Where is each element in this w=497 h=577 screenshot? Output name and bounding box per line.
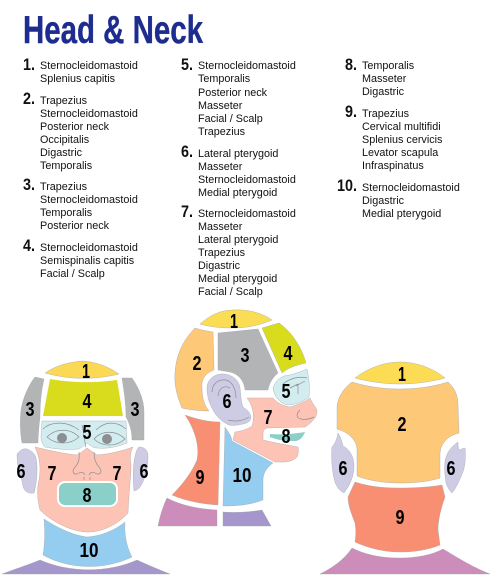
front view labels: 3 xyxy=(130,399,140,421)
front view labels: 6 xyxy=(16,461,26,483)
front view labels xyxy=(16,361,148,562)
legend item 4: 4. xyxy=(23,237,35,255)
zone 5 eyes xyxy=(41,421,127,449)
side view head diagram xyxy=(158,310,317,526)
zone 9 neck back xyxy=(172,415,220,505)
zone 8 mouth xyxy=(58,482,117,506)
zone 1 crown xyxy=(355,362,445,384)
zone 7 face xyxy=(35,447,133,532)
zone 4 forehead xyxy=(262,323,306,373)
zone 4 forehead xyxy=(43,379,123,416)
shoulders xyxy=(320,548,490,574)
side view labels: 2 xyxy=(192,353,202,375)
legend item 7: Digastric xyxy=(198,260,241,272)
back view labels: 6 xyxy=(446,458,456,480)
front view labels: 8 xyxy=(82,485,92,507)
nose xyxy=(73,452,101,480)
zone 3 right temple xyxy=(122,378,144,440)
legend item 6 xyxy=(181,143,296,199)
right eye xyxy=(94,423,126,445)
zone 2 back of head xyxy=(337,382,459,483)
legend item 7: Lateral pterygoid xyxy=(198,234,278,246)
legend item 7: Sternocleidomastoid xyxy=(198,208,296,220)
back view labels: 6 xyxy=(338,458,348,480)
legend item 6: Masseter xyxy=(198,161,243,173)
side view labels: 6 xyxy=(222,391,232,413)
legend item 8: 8. xyxy=(345,56,357,74)
legend item 9: Splenius cervicis xyxy=(362,134,443,146)
shoulders xyxy=(2,560,170,574)
legend item 5: Trapezius xyxy=(198,126,246,138)
legend item 10: Medial pterygoid xyxy=(362,208,441,220)
legend item 4 xyxy=(23,237,138,280)
legend item 5: Masseter xyxy=(198,100,243,112)
side view labels: 10 xyxy=(232,465,252,487)
zone 7 cheek and jaw xyxy=(233,398,317,462)
front view labels: 3 xyxy=(26,399,34,421)
legend item 4: Sternocleidomastoid xyxy=(40,242,138,254)
side view labels: 3 xyxy=(240,345,250,367)
left eye xyxy=(43,423,86,447)
legend item 4: Facial / Scalp xyxy=(40,268,105,280)
legend item 9: 9. xyxy=(345,103,357,121)
legend item 10 xyxy=(337,177,460,220)
legend item 10: Sternocleidomastoid xyxy=(362,182,460,194)
legend item 7: Medial pterygoid xyxy=(198,273,277,285)
zone 2 back of head xyxy=(175,328,214,411)
side view labels: 1 xyxy=(230,311,238,333)
legend item 2: 2. xyxy=(23,90,35,108)
zone 6 left ear xyxy=(17,449,37,493)
legend item 1 xyxy=(23,56,138,85)
legend item 6: Sternocleidomastoid xyxy=(198,174,296,186)
legend item 9: Trapezius xyxy=(362,108,410,120)
legend item 2 xyxy=(23,90,138,172)
left shoulder xyxy=(158,498,217,526)
legend item 6: Medial pterygoid xyxy=(198,187,277,199)
legend item 3: Posterior neck xyxy=(40,220,110,232)
side view labels: 5 xyxy=(282,381,290,403)
front view labels: 5 xyxy=(82,422,92,444)
zone 3 temporal xyxy=(218,329,278,390)
legend item 6: 6. xyxy=(181,143,193,161)
legend item 7: Masseter xyxy=(198,221,243,233)
eye detail xyxy=(283,377,307,394)
legend item 7: Trapezius xyxy=(198,247,246,259)
front view head diagram xyxy=(2,361,170,574)
legend item 7: Facial / Scalp xyxy=(198,286,263,298)
front view labels: 4 xyxy=(82,391,92,413)
legend item 2: Trapezius xyxy=(40,95,88,107)
legend item 5: Sternocleidomastoid xyxy=(198,60,296,72)
legend item 8: Masseter xyxy=(362,73,407,85)
ear detail xyxy=(212,380,249,421)
legend item 3: Trapezius xyxy=(40,181,88,193)
side view labels: 4 xyxy=(284,343,293,365)
front view labels: 10 xyxy=(80,540,98,562)
side view labels: 9 xyxy=(196,467,204,489)
legend item 3: Temporalis xyxy=(40,207,93,219)
legend item 10: Digastric xyxy=(362,195,405,207)
zone 9 neck xyxy=(348,482,445,552)
front view labels: 7 xyxy=(48,463,56,485)
back view labels: 1 xyxy=(398,364,406,386)
zone 6 right ear xyxy=(133,447,148,491)
back view head diagram xyxy=(320,362,490,574)
legend item 4: Semispinalis capitis xyxy=(40,255,135,267)
legend item 9 xyxy=(345,103,443,172)
side view labels: 7 xyxy=(264,407,272,429)
legend item 2: Digastric xyxy=(40,147,83,159)
zone 1 crown xyxy=(45,361,119,378)
legend item 3: 3. xyxy=(23,176,35,194)
legend item 1: 1. xyxy=(23,56,35,74)
front view labels: 7 xyxy=(112,463,122,485)
legend item 1: Sternocleidomastoid xyxy=(40,60,138,72)
zone 1 crown xyxy=(200,310,272,328)
legend item 7: 7. xyxy=(181,203,193,221)
zone 6 left ear xyxy=(332,433,354,493)
legend item 2: Posterior neck xyxy=(40,121,110,133)
back view labels xyxy=(338,364,456,529)
back view labels: 9 xyxy=(396,507,404,529)
legend item 9: Infraspinatus xyxy=(362,160,424,172)
title: Head & Neck xyxy=(23,9,203,52)
legend item 3 xyxy=(23,176,138,232)
legend item 5: 5. xyxy=(181,56,193,74)
legend item 8: Digastric xyxy=(362,86,405,98)
legend item 5: Posterior neck xyxy=(198,87,268,99)
back view labels: 2 xyxy=(398,414,406,436)
legend item 10: 10. xyxy=(337,177,357,195)
right shoulder xyxy=(223,510,271,526)
legend item 5 xyxy=(181,56,296,138)
zone 10 neck xyxy=(43,519,132,567)
front view labels: 1 xyxy=(82,361,90,383)
legend column 1 xyxy=(23,56,138,280)
legend column 3 xyxy=(337,56,460,220)
zone 6 right ear xyxy=(445,442,465,493)
legend item 5: Facial / Scalp xyxy=(198,113,263,125)
legend item 5: Temporalis xyxy=(198,73,251,85)
zone 6 ear xyxy=(207,374,251,425)
legend item 2: Sternocleidomastoid xyxy=(40,108,138,120)
legend item 8 xyxy=(345,56,415,98)
legend item 1: Splenius capitis xyxy=(40,73,116,85)
legend item 9: Levator scapula xyxy=(362,147,438,159)
legend column 2 xyxy=(181,56,296,298)
side view labels: 8 xyxy=(282,426,290,448)
zone 3 left temple xyxy=(20,377,44,443)
front view labels: 6 xyxy=(140,461,148,483)
legend item 6: Lateral pterygoid xyxy=(198,148,278,160)
zone 10 neck front xyxy=(223,427,273,506)
legend item 8: Temporalis xyxy=(362,60,415,72)
zone 8 mouth xyxy=(270,432,305,441)
legend item 3: Sternocleidomastoid xyxy=(40,194,138,206)
nose detail xyxy=(297,410,314,419)
legend item 9: Cervical multifidi xyxy=(362,121,441,133)
zone 5 eye xyxy=(273,369,309,405)
legend item 7 xyxy=(181,203,296,298)
side view labels xyxy=(192,311,293,489)
legend item 2: Temporalis xyxy=(40,160,93,172)
legend item 2: Occipitalis xyxy=(40,134,90,146)
